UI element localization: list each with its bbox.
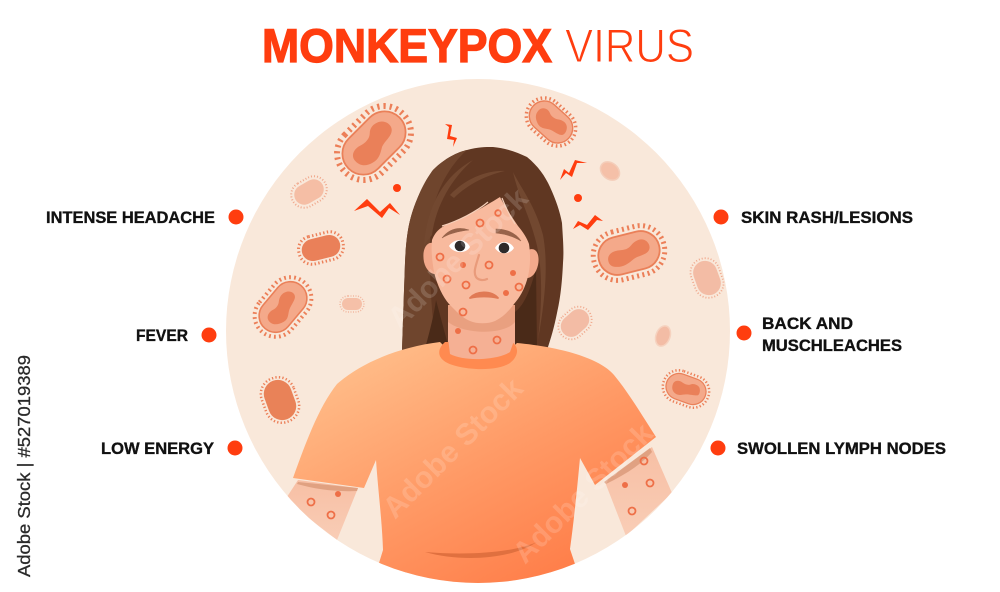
watermark: Adobe Stock [172, 102, 325, 255]
chin shadow [448, 305, 515, 332]
virus: pale far right [687, 254, 727, 302]
arm right [605, 447, 672, 536]
title: VIRUS [565, 19, 694, 72]
label: back and muscle aches [736, 315, 902, 355]
eyebrows [442, 229, 521, 241]
label: back and muscle aches: MUSCHLEACHES [762, 337, 902, 355]
shirt fold [425, 542, 537, 558]
watermark [172, 102, 660, 570]
virus: pale left [286, 171, 332, 213]
nose [475, 255, 487, 280]
label: back and muscle aches: BACK AND [762, 315, 853, 333]
watermark: Adobe Stock [507, 417, 660, 570]
label: fever [136, 327, 216, 345]
ears [423, 243, 539, 278]
label: swollen lymph nodes: SWOLLEN LYMPH NODES [737, 440, 946, 458]
eyes [449, 240, 514, 253]
pain bolts and dots [354, 124, 603, 230]
label: low energy: LOW ENERGY [101, 440, 214, 458]
hair shadow behind neck [426, 268, 537, 350]
virus: solid lower left [256, 373, 304, 427]
virus: pale centre right [553, 301, 597, 345]
virus: small pale left [340, 296, 364, 312]
shirt [293, 342, 656, 590]
virus: large top left [326, 95, 422, 191]
collar [439, 342, 517, 369]
label: fever: FEVER [136, 327, 188, 345]
stock id: Adobe Stock | #527019389 [14, 355, 34, 577]
background circle [226, 79, 730, 583]
title: MONKEYPOX [262, 19, 552, 72]
virus: small pale top right [597, 158, 623, 184]
hair lighter sides [402, 150, 467, 350]
virus: top centre [519, 91, 583, 153]
lower neck [448, 342, 514, 360]
hair top strands [430, 160, 504, 236]
label: intense headache: INTENSE HEADACHE [46, 209, 215, 227]
neck [448, 322, 515, 345]
label: skin rash: SKIN RASH/LESIONS [741, 209, 913, 227]
virus: right large [588, 221, 670, 285]
arm left [285, 480, 358, 540]
watermark: Adobe Stock [377, 372, 530, 525]
hair right strands [513, 172, 546, 340]
virus: solid left [296, 229, 346, 267]
sleeve shadows [297, 448, 652, 491]
virus: small pale right [653, 324, 673, 348]
virus: mid left [246, 269, 320, 345]
woman figure [285, 147, 672, 590]
virus: lower right [658, 366, 714, 412]
face highlight strands [442, 198, 515, 226]
watermark: Adobe Stock [382, 182, 535, 335]
lesions [308, 210, 654, 518]
hair [402, 147, 563, 350]
face [432, 197, 530, 323]
mouth [470, 292, 498, 298]
